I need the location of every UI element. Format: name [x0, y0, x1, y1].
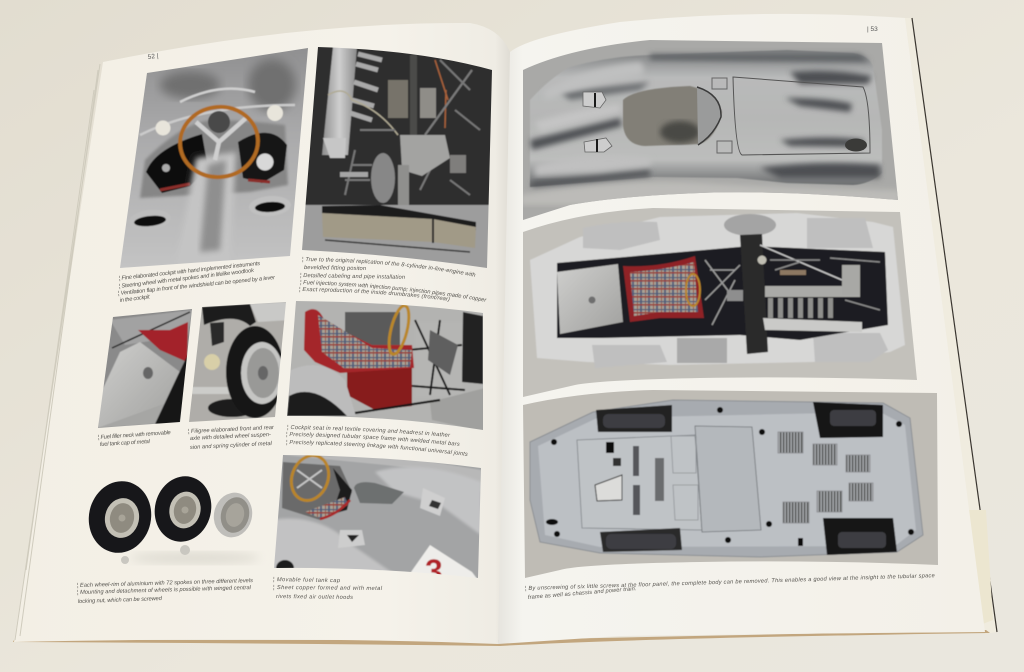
icon: aluminium rim: [209, 489, 257, 541]
caption: fuel tank cap: rivets fixed air outlet hoods: [276, 594, 353, 601]
caption: wheel suspension: axle with detailed wheel suspen-: [190, 432, 271, 442]
icon: wheel two: [148, 470, 218, 548]
photo: wheel and suspension: [189, 302, 286, 422]
wheel wells: [596, 405, 672, 432]
icon: winged nuts: [121, 545, 190, 564]
caption: wheels: locking nut, which can be screwed: [78, 596, 163, 605]
black tubular frame: [557, 246, 888, 340]
seat: [623, 256, 704, 322]
caption: engine: ¦ Exact reproduction of the inside drumbrakes (front/rear): [300, 286, 450, 302]
caption: cockpit: in the cockpit: [120, 294, 150, 304]
photo: wheels and rim: [82, 470, 260, 564]
floor pan: [530, 400, 923, 557]
caption: body removal: [525, 573, 935, 601]
bonnet outline: [733, 77, 870, 155]
photo: car top view: [520, 36, 902, 226]
frame details: [705, 260, 740, 325]
caption: fuel filler neck: fuel tank cap of metal: [100, 439, 151, 448]
shading streaks: [530, 54, 880, 187]
caption: seat: ¦ Cockpit seat in real textile covering and headrest in leather: [288, 424, 450, 437]
caption: fuel filler neck: ¦ Fuel filler neck with removable: [98, 430, 171, 441]
left page: [14, 23, 501, 644]
photo: silver car with fuel tank cap: 3: [425, 553, 443, 589]
caption: cockpit: ¦ Steering wheel with metal spokes and in lifelike woodlook: [119, 268, 255, 290]
caption: seat: ¦ Precisely replicated steering linkage with functional universal joints: [286, 440, 468, 456]
caption: fuel tank cap: ¦ Sheet copper formed and with metal: [273, 585, 383, 592]
caption: body removal: frame as well as chassis and power train.: [528, 586, 637, 601]
photo: cockpit and steering wheel: [115, 45, 315, 270]
caption: cockpit: ¦ Fine elaborated cockpit with hand implemented instruments: [119, 261, 261, 282]
page block under the book: [13, 630, 990, 646]
photo: cockpit seat: [285, 298, 485, 433]
photo: fuel filler neck: [98, 309, 192, 428]
photo: engine: [300, 45, 495, 270]
caption: cockpit: [118, 261, 276, 304]
caption: engine: beveldled fitting positon: [304, 265, 366, 272]
caption: engine: [300, 256, 487, 302]
page number 52: 52 |: [147, 53, 159, 61]
caption: cockpit: ¦ Ventilation flap in front of the windshield can be opened by a lever: [118, 275, 276, 297]
caption: wheel suspension: ¦ Filigree elaborated front and rear: [188, 425, 275, 435]
vents: [778, 432, 873, 523]
floor holes and slots: [546, 407, 914, 546]
photo: chassis without body: [520, 205, 920, 400]
caption: wheel suspension: sion and spring cylinder of metal: [190, 441, 273, 451]
caption: fuel tank cap: [273, 577, 383, 601]
photo: underside of the car: [520, 388, 940, 583]
photo: silver car with fuel tank cap: [274, 455, 481, 578]
caption: wheels: ¦ Mounting and detachment of wheels is possible with winged central: [77, 585, 252, 596]
floor plate: [530, 213, 905, 365]
caption: engine: ¦ True to the original replication of the 8-cylinder in-line-engine with: [302, 256, 476, 277]
icon: wheel one: [82, 475, 158, 559]
caption: seat: [286, 424, 468, 456]
engine: [765, 286, 860, 297]
caption: wheels: ¦ Each wheel-rim of aluminium with 72 spokes on three different levels: [77, 578, 253, 589]
back cover edge: [905, 18, 997, 634]
caption: fuel filler neck: [98, 430, 171, 448]
caption: engine: ¦ Detailled cabeling and pipe installation: [300, 273, 405, 281]
caption: wheels: [77, 578, 253, 605]
page number 53: | 53: [867, 26, 878, 33]
caption: seat: ¦ Precisely designed tubular space frame with welded metal bars: [286, 432, 460, 446]
fuel tank: [557, 264, 623, 334]
caption: engine: ¦ Fuel injection system with injection pump; injection pipes made of copper: [300, 280, 487, 302]
caption: body removal: ¦ By unscrewing of six little screws at the floor panel, the complete body can be removed. This enables a good view at the insight to the tubular space: [525, 573, 935, 592]
right page: [498, 14, 985, 644]
black cross bar: [740, 234, 768, 354]
cockpit opening: [623, 86, 722, 146]
caption: wheel suspension: [188, 425, 275, 451]
caption: fuel tank cap: ¦ Movable fuel tank cap: [273, 577, 340, 584]
